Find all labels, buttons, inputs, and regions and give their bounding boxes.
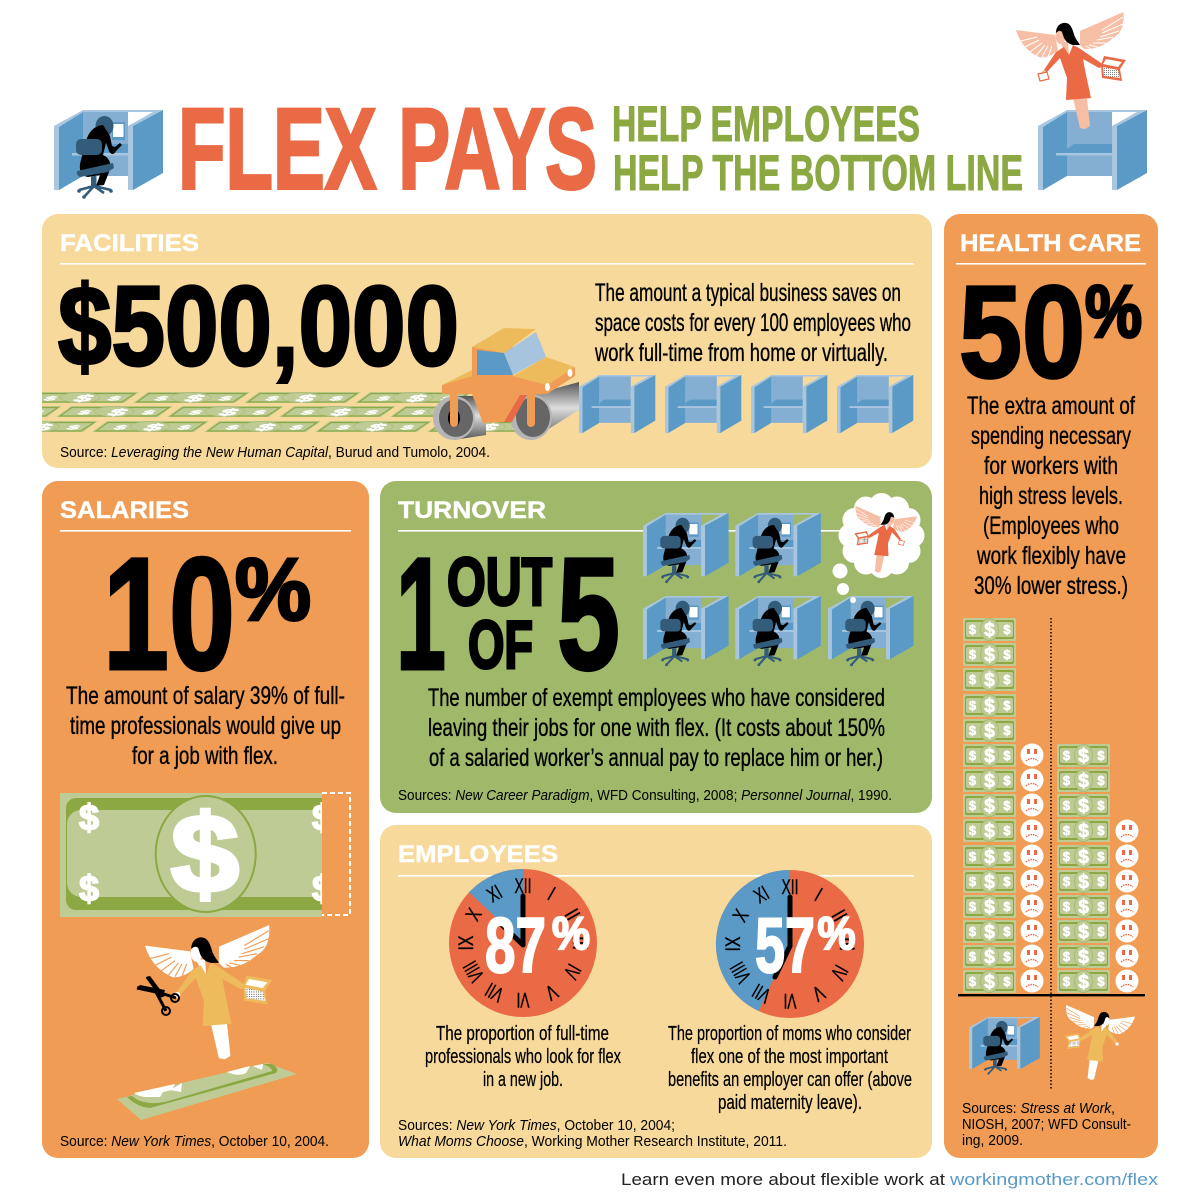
caption: 57%: benefits an employer can offer (above [668, 1069, 912, 1091]
flattened money rows [42, 392, 526, 432]
clock chart: 87%: XI [483, 881, 506, 907]
clock chart: 87% [449, 869, 597, 1017]
footer link line: Learn even more about flexible work at [621, 1170, 945, 1189]
title: FLEX PAYS [178, 86, 597, 214]
health care description: The extra amount of [967, 392, 1135, 420]
icon: cut dollar bill: $ [171, 793, 239, 916]
turnover figure: 5 [557, 524, 620, 703]
turnover source: Sources: New Career Paradigm, WFD Consulting, 2008; Personnel Journal, 1990. [398, 788, 892, 804]
employees sources: What Moms Choose, Working Mother Research Institute, 2011. [398, 1134, 787, 1150]
column: bills with flex [1057, 744, 1110, 993]
salaries source: Source: New York Times, October 10, 2004. [60, 1134, 329, 1150]
panel: turnover [380, 481, 932, 813]
clock chart: 57%: 57 [755, 901, 815, 989]
health care description: 30% lower stress.) [974, 572, 1128, 600]
facilities description [594, 279, 911, 367]
clock chart: 87%: V [541, 979, 561, 1004]
pictogram chart: money and stress [958, 618, 1145, 1090]
facilities description: The amount a typical business saves on [595, 279, 901, 307]
icon: cubicle worker header [54, 110, 163, 199]
clock chart: 57%: VIII [726, 958, 756, 987]
icon: empty cubicle with flying angel [1016, 12, 1147, 190]
facilities figure: $500,000 [58, 263, 459, 389]
clock chart: 87%: II [560, 905, 584, 924]
facilities description: work full-time from home or virtually. [594, 339, 888, 367]
turnover figure: OF [468, 607, 533, 683]
turnover description: of a salaried worker’s annual pay to replace him or her.) [429, 744, 883, 772]
footer link line [621, 1170, 1159, 1189]
clock chart: 87%: IX [455, 936, 478, 950]
salaries figure: 10 [103, 524, 235, 703]
salaries description: time professionals would give up [70, 712, 341, 740]
turnover figure: OUT [447, 544, 552, 620]
facilities description: space costs for every 100 employees who [595, 309, 911, 337]
clock chart: 57%: IV [826, 961, 852, 984]
health care figure: 50 [959, 258, 1085, 405]
salaries heading: SALARIES [60, 497, 189, 524]
health care description: for workers with [984, 452, 1118, 480]
caption: 87%: professionals who look for flex [425, 1046, 621, 1068]
subtitle: HELP THE BOTTOM LINE [613, 145, 1023, 201]
caption: 87%: in a new job. [483, 1069, 563, 1091]
empty cubicles row [579, 375, 913, 433]
health care sources: ing, 2009. [962, 1133, 1023, 1149]
health care description: (Employees who [983, 512, 1119, 540]
facilities heading: FACILITIES [60, 230, 199, 257]
clock chart: 87%: 87 [485, 901, 546, 989]
clock chart: 57%: X [729, 906, 754, 926]
cubicle workers grid [643, 513, 914, 666]
icon: angel with scissors [137, 925, 272, 1059]
health care description: spending necessary [971, 422, 1131, 450]
employees sources: Sources: New York Times, October 10, 2004; [398, 1118, 675, 1134]
health care figure: % [1085, 270, 1142, 353]
health care sources: Sources: Stress at Work, [962, 1101, 1115, 1117]
panel: employees [380, 825, 932, 1158]
clock chart: 57%: % [818, 907, 856, 959]
clock chart: 57%: XI [750, 882, 773, 908]
clock chart: 87%: VI [516, 988, 530, 1011]
salaries description [66, 682, 345, 770]
icon: cut dollar bill: $ [79, 797, 99, 838]
panel: salaries [42, 481, 369, 1158]
icon: fallen bill piece [117, 1063, 297, 1120]
clock chart: 57%: VI [784, 989, 796, 1012]
icon: steam roller [433, 328, 579, 440]
caption: 57%: flex one of the most important [691, 1046, 888, 1068]
turnover description [428, 684, 885, 772]
clock chart: 87%: % [552, 907, 590, 959]
turnover heading: TURNOVER [398, 497, 546, 524]
clock chart: 57% [716, 870, 864, 1018]
caption: 57%: The proportion of moms who consider [668, 1023, 911, 1045]
clock chart: 87%: VII [482, 978, 508, 1006]
health care sources: NIOSH, 2007; WFD Consult- [962, 1117, 1131, 1133]
health care description: work flexibly have [976, 542, 1126, 570]
clock chart: 57%: II [827, 906, 851, 925]
icon: cut dollar bill: $ [79, 868, 99, 909]
column: sad faces with flex [1116, 820, 1138, 992]
clock chart: 57%: III [835, 937, 858, 951]
clock chart: 57%: VII [749, 979, 775, 1007]
clock chart: 57%: XII [782, 876, 798, 899]
clock chart: 57%: IX [722, 936, 745, 952]
subtitle: HELP EMPLOYEES [612, 96, 920, 152]
clock chart: 57%: V [808, 980, 828, 1005]
salaries description: The amount of salary 39% of full- [66, 682, 345, 710]
footer link line: workingmother.com/flex [949, 1170, 1159, 1189]
icon: cut dollar bill: $ [312, 868, 332, 909]
panel: facilities [0, 214, 932, 468]
icon: cut dollar bill: $ [312, 797, 332, 838]
subtitle [612, 96, 1023, 201]
turnover description: The number of exempt employees who have considered [428, 684, 885, 712]
facilities source: Source: Leveraging the New Human Capital, Burud and Tumolo, 2004. [60, 445, 490, 461]
turnover description: leaving their jobs for one with flex. (It costs about 150% [428, 714, 885, 742]
icon: cubicle worker small [969, 1017, 1040, 1075]
salaries description: for a job with flex. [132, 742, 278, 770]
caption: 87%: The proportion of full-time [436, 1023, 609, 1045]
icon: cut dollar bill [60, 793, 367, 917]
clock chart: 87%: VIII [459, 957, 489, 986]
turnover figure: 1 [396, 524, 446, 703]
column: sad faces at cubicle [1020, 744, 1044, 992]
icon: angel small [1065, 1005, 1135, 1080]
employees sources [398, 1118, 787, 1150]
clock chart: 57%: I [811, 884, 826, 906]
turnover figure [396, 524, 620, 703]
clock chart: 87%: III [568, 936, 591, 950]
caption: 87% [425, 1023, 621, 1091]
salaries figure: % [235, 540, 311, 639]
thought bubble with angel [832, 493, 924, 603]
clock chart: 87%: I [544, 883, 559, 905]
panel: health care [944, 214, 1158, 1158]
caption: 57%: paid maternity leave). [718, 1092, 862, 1114]
clock chart: 87%: IV [559, 960, 585, 983]
column: bills at cubicle [963, 618, 1016, 993]
employees heading: EMPLOYEES [398, 841, 558, 868]
clock chart: 87%: X [462, 905, 487, 925]
caption: 57% [668, 1023, 912, 1114]
health care description: high stress levels. [979, 482, 1123, 510]
health care sources [962, 1101, 1131, 1149]
health care heading: HEALTH CARE [960, 230, 1141, 257]
health care description [967, 392, 1135, 600]
clock chart: 87%: XII [514, 875, 532, 898]
